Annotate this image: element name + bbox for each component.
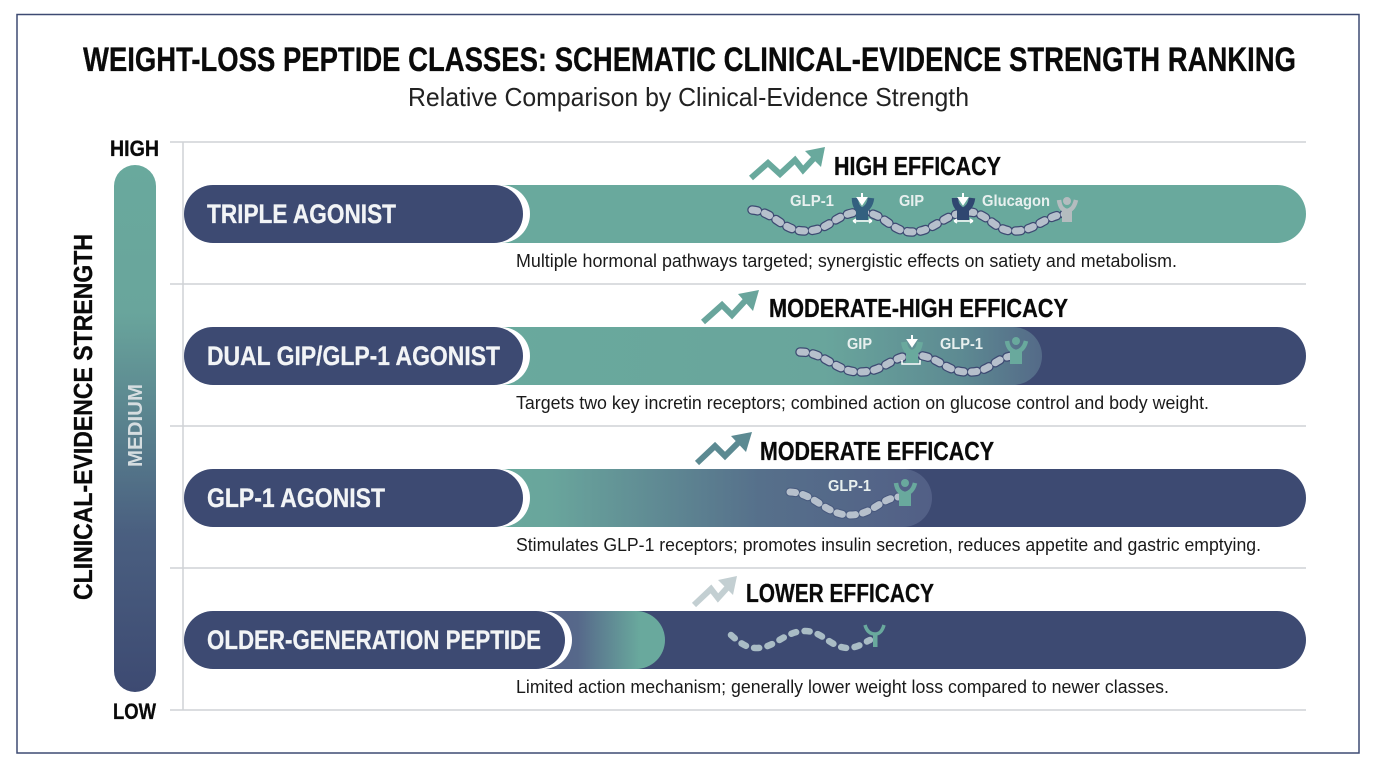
receptor: GLP-1: [1007, 337, 1026, 364]
class pill: [184, 185, 523, 243]
white ring: [184, 469, 530, 527]
bar: [440, 469, 1306, 527]
class pill: [184, 469, 523, 527]
subtitle: Relative Comparison by Clinical-Evidence Strength: [408, 82, 969, 112]
class pill: GLP-1 AGONIST: [207, 483, 385, 513]
description: Limited action mechanism; generally lower weight loss compared to newer classes.: [516, 677, 1169, 697]
bar fill: [480, 611, 665, 669]
receptor: GIP: [954, 193, 973, 223]
class pill: TRIPLE AGONIST: [207, 199, 396, 229]
bar fill: [440, 327, 1042, 385]
class pill: [184, 611, 565, 669]
peptide chain: [790, 492, 898, 515]
receptor labels: Glucagon: [982, 193, 1050, 210]
high label: HIGH: [110, 136, 159, 161]
white ring: [184, 327, 530, 385]
efficacy heading: MODERATE EFFICACY: [760, 436, 994, 466]
row: triple agonist: [184, 147, 1306, 271]
description: Multiple hormonal pathways targeted; synergistic effects on satiety and metabolism.: [516, 251, 1177, 271]
trend arrow: [697, 432, 752, 463]
receptor: GIP: [902, 335, 920, 364]
gradient scale bar: [114, 165, 156, 692]
peptide chain: [731, 631, 870, 648]
bar: [440, 327, 1306, 385]
trend arrow: [751, 147, 825, 178]
row: dual GIP/GLP-1 agonist: [184, 290, 1306, 413]
class pill: OLDER-GENERATION PEPTIDE: [207, 625, 541, 655]
class pill: DUAL GIP/GLP-1 AGONIST: [207, 341, 500, 371]
receptor labels: GIP: [847, 336, 872, 353]
medium label: MEDIUM: [125, 384, 147, 467]
bar: [440, 185, 1306, 243]
row: older-generation peptide: [184, 576, 1306, 697]
white ring: [184, 185, 530, 243]
receptor labels: [847, 336, 983, 353]
receptor label: GLP-1: [828, 478, 871, 495]
efficacy heading: HIGH EFFICACY: [834, 151, 1001, 181]
bar: [480, 611, 1306, 669]
efficacy heading: MODERATE-HIGH EFFICACY: [769, 293, 1068, 323]
receptor labels: GLP-1: [790, 193, 834, 210]
peptide chain: [800, 352, 1012, 372]
low label: LOW: [113, 699, 156, 724]
peptide chain: [752, 210, 1065, 232]
row: GLP-1 agonist: [184, 432, 1306, 555]
description: Targets two key incretin receptors; combined action on glucose control and body weight.: [516, 393, 1209, 413]
receptor: glucagon: [1059, 197, 1076, 222]
trend arrow: [694, 576, 737, 605]
description: Stimulates GLP-1 receptors; promotes insulin secretion, reduces appetite and gastric emptying.: [516, 535, 1261, 555]
efficacy heading: LOWER EFFICACY: [746, 578, 934, 608]
class pill: [184, 327, 523, 385]
receptor: [865, 625, 884, 647]
white ring: [184, 611, 572, 669]
receptor labels: GIP: [899, 193, 924, 210]
trend arrow: [703, 290, 759, 322]
y axis: clinical-evidence strength: [68, 136, 159, 724]
receptor: GLP-1: [853, 193, 872, 223]
receptor labels: GLP-1: [940, 336, 983, 353]
receptor labels: [790, 193, 1050, 210]
receptor: GLP-1: [896, 479, 915, 506]
bar fill: [440, 469, 932, 527]
axis title: CLINICAL-EVIDENCE STRENGTH: [68, 234, 98, 600]
